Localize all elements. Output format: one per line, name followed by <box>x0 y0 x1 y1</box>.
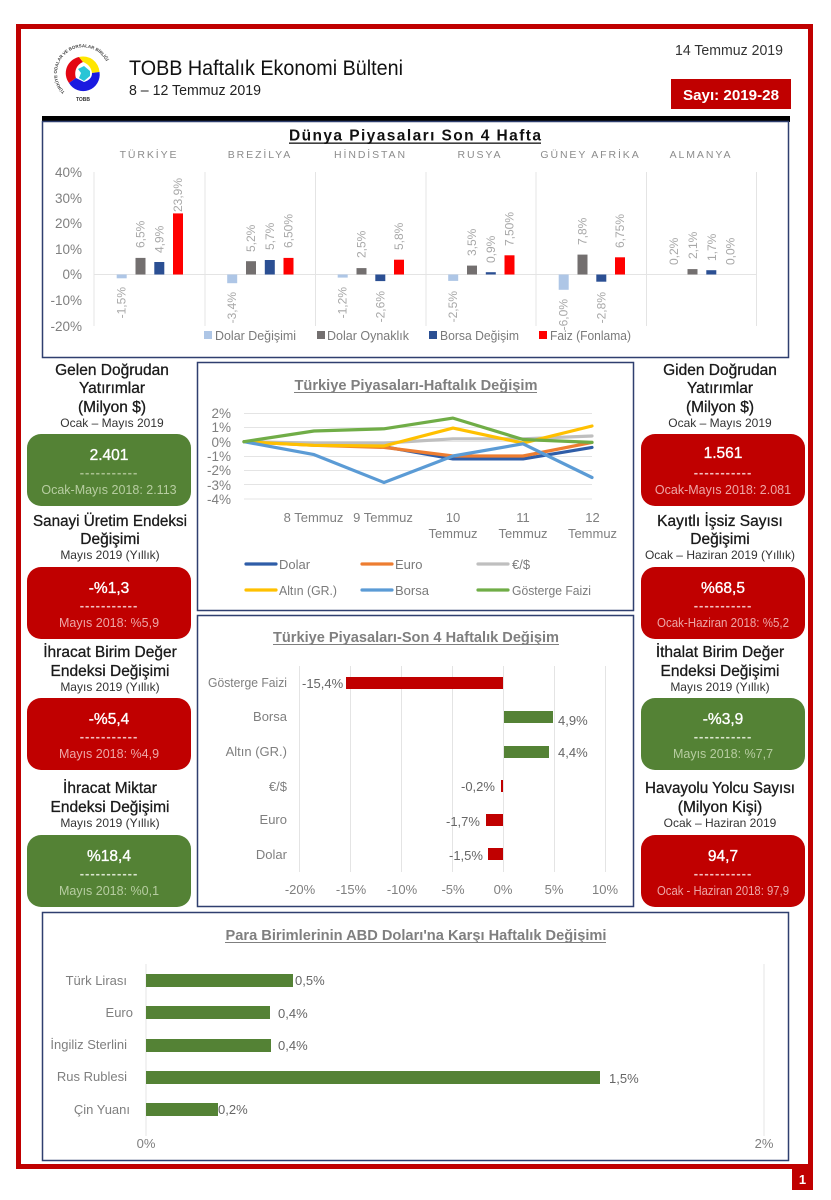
currency values: 0,5% <box>295 973 325 988</box>
line: Borsa <box>244 442 592 482</box>
rotated data labels: -2,8% <box>594 292 608 323</box>
currency categories: Çin Yuanı <box>74 1102 130 1117</box>
rotated data labels: -6,0% <box>557 299 571 330</box>
bar chart x axis: 5% <box>545 882 564 897</box>
kpi: sanayi üretim: Mayıs 2019 (Yıllık) <box>60 548 160 562</box>
kpi: havayolu yolcu: Havayolu Yolcu Sayısı <box>645 780 795 797</box>
kpi: kayıtlı işsiz: Kayıtlı İşsiz Sayısı <box>657 512 783 530</box>
line chart y axis: -1% <box>207 449 231 464</box>
rotated data labels: 1,7% <box>705 233 719 261</box>
issue badge <box>671 79 791 109</box>
bar values: -1,7% <box>446 814 480 829</box>
rotated data labels: 0,9% <box>484 235 498 263</box>
kpi: ihracat miktar <box>27 779 191 907</box>
line chart x axis: Temmuz <box>568 526 617 541</box>
kpi: gelen doğrudan yatırımlar: Ocak – Mayıs 2019 <box>60 416 164 430</box>
bar values: 4,9% <box>558 713 588 728</box>
kpi: havayolu yolcu <box>641 780 805 907</box>
y axis labels: 10% <box>55 242 82 257</box>
kpi: sanayi üretim <box>27 512 191 639</box>
rotated data labels: 5,8% <box>392 222 406 250</box>
bar values: -0,2% <box>461 779 495 794</box>
currency categories: İngiliz Sterlini <box>50 1037 127 1052</box>
rotated data labels: 7,50% <box>502 212 516 246</box>
kpi: gelen doğrudan yatırımlar: (Milyon $) <box>78 399 146 416</box>
line chart legend: Gösterge Faizi <box>512 583 591 598</box>
legend: Dolar Oynaklık <box>327 328 409 343</box>
bar chart x axis: -10% <box>387 882 418 897</box>
line chart legend: €/$ <box>512 557 531 572</box>
currency grid <box>146 964 764 1136</box>
line chart x axis: 11 <box>516 510 530 525</box>
rotated data labels: -1,2% <box>336 287 350 318</box>
line chart y axis: -3% <box>207 478 231 493</box>
line chart y axis: 0% <box>211 435 231 450</box>
issue badge: Sayı: 2019-28 <box>683 87 779 104</box>
kpi: kayıtlı işsiz: ----------- <box>694 598 752 613</box>
bar chart categories: Euro <box>260 812 287 827</box>
line chart title: Türkiye Piyasaları-Haftalık Değişim <box>294 378 538 394</box>
y axis labels: 40% <box>55 165 82 180</box>
kpi: ithalat birim değer: Endeksi Değişimi <box>661 663 779 680</box>
kpi: gelen doğrudan yatırımlar: 2.401 <box>90 447 128 464</box>
kpi: sanayi üretim: -%1,3 <box>89 580 129 597</box>
currency categories: Euro <box>106 1005 133 1020</box>
bar chart categories: Gösterge Faizi <box>208 675 287 690</box>
bars: Dolar Değişimi <box>117 274 569 290</box>
bar values: -15,4% <box>302 676 344 691</box>
rotated data labels: 0,0% <box>724 237 738 265</box>
kpi: sanayi üretim: Sanayi Üretim Endeksi <box>33 512 187 530</box>
rotated data labels: 0,2% <box>667 237 681 265</box>
bar values <box>302 676 588 863</box>
country labels: TÜRKİYE <box>120 148 178 161</box>
rotated data labels: 2,5% <box>354 230 368 258</box>
country labels: RUSYA <box>458 149 502 161</box>
currency categories <box>50 973 133 1117</box>
rotated data labels: -1,5% <box>115 287 129 318</box>
line chart legend: Borsa <box>395 583 430 598</box>
bar chart categories: Altın (GR.) <box>226 744 287 759</box>
bar chart categories: Dolar <box>256 847 288 862</box>
line: Altın <box>244 426 592 446</box>
bar chart x axis: -5% <box>441 882 465 897</box>
currency values: 0,4% <box>278 1006 308 1021</box>
line chart y axis <box>207 406 231 507</box>
country labels: HİNDİSTAN <box>334 148 407 161</box>
kpi: giden doğrudan yatırımlar: Ocak – Mayıs 2019 <box>668 416 772 430</box>
kpi: ihracat birim değer: Endeksi Değişimi <box>51 663 169 680</box>
line chart x axis: Temmuz <box>428 526 478 541</box>
currency values: 1,5% <box>609 1071 639 1086</box>
country labels: ALMANYA <box>670 149 732 161</box>
bar chart title: Türkiye Piyasaları-Son 4 Haftalık Değişim <box>273 630 559 646</box>
bar values: 4,4% <box>558 745 588 760</box>
kpi: ithalat birim değer: İthalat Birim Değer <box>656 643 784 661</box>
kpi: ihracat miktar: İhracat Miktar <box>63 779 157 797</box>
kpi: kayıtlı işsiz <box>641 512 805 639</box>
country labels: GÜNEY AFRİKA <box>540 148 641 161</box>
line chart x axis: 8 Temmuz <box>284 510 343 525</box>
rotated data labels: 5,7% <box>263 222 277 250</box>
kpi: ihracat miktar: Mayıs 2018: %0,1 <box>59 884 159 898</box>
line chart legend: Dolar <box>279 557 311 572</box>
world markets title: Dünya Piyasaları Son 4 Hafta <box>289 128 541 144</box>
kpi: ihracat birim değer: Mayıs 2019 (Yıllık) <box>60 680 160 694</box>
bar chart x axis: 10% <box>592 882 618 897</box>
line chart x axis <box>284 510 617 541</box>
y axis labels: -20% <box>50 319 82 334</box>
kpi: havayolu yolcu: 94,7 <box>708 848 738 865</box>
publication date: 14 Temmuz 2019 <box>675 43 783 59</box>
rotated data labels: -2,6% <box>373 291 387 322</box>
kpi: gelen doğrudan yatırımlar: ----------- <box>80 465 138 480</box>
kpi: ihracat birim değer: İhracat Birim Değer <box>43 643 177 661</box>
kpi: giden doğrudan yatırımlar: ----------- <box>694 465 752 480</box>
kpi: sanayi üretim: Mayıs 2018: %5,9 <box>59 616 159 630</box>
currency x axis: 2% <box>755 1136 774 1151</box>
rotated data labels: 3,5% <box>465 228 479 256</box>
panel: currencies against USD <box>42 912 788 1160</box>
line chart x axis: 12 <box>585 510 600 525</box>
kpi: giden doğrudan yatırımlar: Ocak-Mayıs 2018: 2.081 <box>655 483 791 497</box>
currency categories: Türk Lirası <box>66 973 127 988</box>
kpi: ihracat miktar: %18,4 <box>87 848 131 865</box>
bar chart x axis <box>285 882 618 897</box>
kpi: gelen doğrudan yatırımlar: Yatırımlar <box>79 380 145 397</box>
kpi: ithalat birim değer: ----------- <box>694 729 752 744</box>
kpi: ithalat birim değer: Mayıs 2018: %7,7 <box>673 747 773 761</box>
legend: Dolar Değişimi <box>215 328 296 343</box>
bars: Borsa Değişim <box>154 260 716 282</box>
line: Dolar <box>244 442 592 459</box>
line chart legend: Euro <box>395 557 422 572</box>
panel: four-week bar chart <box>198 616 634 906</box>
bar chart x axis: 0% <box>494 882 513 897</box>
currency x axis: 0% <box>137 1136 156 1151</box>
bars <box>346 677 553 860</box>
legend <box>204 328 631 343</box>
rotated data labels <box>115 178 737 330</box>
kpi: giden doğrudan yatırımlar: (Milyon $) <box>686 399 754 416</box>
panel: world markets <box>42 122 788 358</box>
country labels: BREZİLYA <box>228 148 292 161</box>
bar chart categories: Borsa <box>253 709 288 724</box>
grid <box>94 172 757 326</box>
rotated data labels: -2,5% <box>446 291 460 322</box>
line: Euro <box>244 442 592 456</box>
kpi: havayolu yolcu: Ocak – Haziran 2019 <box>664 816 777 830</box>
y axis labels <box>50 165 82 334</box>
line chart y axis: 2% <box>211 406 231 421</box>
line chart legend: Altın (GR.) <box>279 583 337 598</box>
kpi: ihracat birim değer <box>27 643 191 770</box>
kpi: havayolu yolcu: ----------- <box>694 866 752 881</box>
kpi: ithalat birim değer <box>641 643 805 770</box>
kpi: giden doğrudan yatırımlar: Giden Doğrudan <box>663 362 777 379</box>
header logo: TÜRKİYE ODALAR VE BORSALAR BİRLİĞİ <box>54 44 110 94</box>
line chart y axis: -4% <box>207 492 231 507</box>
line chart x axis: Temmuz <box>498 526 548 541</box>
line: Gösterge Faizi <box>244 418 592 442</box>
kpi: havayolu yolcu: (Milyon Kişi) <box>678 799 762 816</box>
kpi: giden doğrudan yatırımlar: 1.561 <box>704 445 742 462</box>
currency bars <box>146 974 600 1116</box>
kpi: kayıtlı işsiz: Değişimi <box>690 531 750 548</box>
kpi: ihracat birim değer: -%5,4 <box>89 711 130 728</box>
bar values: -1,5% <box>449 848 483 863</box>
kpi: ithalat birim değer: -%3,9 <box>703 711 743 728</box>
bar chart x axis: -15% <box>336 882 367 897</box>
line chart legend <box>246 557 591 598</box>
bar chart x axis: -20% <box>285 882 316 897</box>
header logo: TOBB <box>76 97 90 103</box>
kpi: gelen doğrudan yatırımlar <box>27 362 191 506</box>
kpi: kayıtlı işsiz: %68,5 <box>701 580 745 597</box>
rotated data labels: 7,8% <box>576 217 590 245</box>
kpi: sanayi üretim: ----------- <box>80 598 138 613</box>
line chart x axis: 10 <box>446 510 460 525</box>
legend: Borsa Değişim <box>440 328 519 343</box>
y axis labels: 20% <box>55 216 82 231</box>
header rule <box>42 116 790 122</box>
y axis labels: 0% <box>62 267 82 282</box>
line: €/$ <box>244 436 592 443</box>
bar chart categories: €/$ <box>269 779 288 794</box>
kpi: giden doğrudan yatırımlar: Yatırımlar <box>687 380 753 397</box>
kpi: ihracat miktar: ----------- <box>80 866 138 881</box>
y axis labels: 30% <box>55 191 82 206</box>
currency values: 0,4% <box>278 1038 308 1053</box>
kpi: gelen doğrudan yatırımlar: Ocak-Mayıs 2018: 2.113 <box>41 483 177 497</box>
page number <box>792 1168 813 1190</box>
panel: weekly line chart <box>198 362 634 610</box>
bars: Dolar Oynaklık <box>136 255 698 274</box>
currency x axis <box>137 1136 774 1151</box>
rotated data labels: 23,9% <box>171 178 185 212</box>
bar chart categories <box>208 675 288 862</box>
header date range: 8 – 12 Temmuz 2019 <box>129 83 261 99</box>
line chart x axis: 9 Temmuz <box>353 510 413 525</box>
rotated data labels: -3,4% <box>225 292 239 323</box>
rotated data labels: 6,50% <box>282 214 296 248</box>
currency values <box>218 973 639 1117</box>
kpi: giden doğrudan yatırımlar <box>641 362 805 506</box>
rotated data labels: 6,5% <box>134 220 148 248</box>
kpi: sanayi üretim: Değişimi <box>80 531 140 548</box>
kpi: ithalat birim değer: Mayıs 2019 (Yıllık) <box>670 680 770 694</box>
line chart grid <box>244 414 592 499</box>
legend: Faiz (Fonlama) <box>550 328 631 343</box>
y axis labels: -10% <box>50 293 82 308</box>
rotated data labels: 2,1% <box>686 231 700 259</box>
kpi: ihracat miktar: Endeksi Değişimi <box>51 799 169 816</box>
header title: TOBB Haftalık Ekonomi Bülteni <box>129 57 403 80</box>
bars: Faiz (Fonlama) <box>173 213 625 274</box>
currency chart title: Para Birimlerinin ABD Doları'na Karşı Haftalık Değişimi <box>226 928 606 944</box>
kpi: kayıtlı işsiz: Ocak-Haziran 2018: %5,2 <box>657 616 789 630</box>
kpi: ihracat birim değer: Mayıs 2018: %4,9 <box>59 747 159 761</box>
line chart y axis: 1% <box>211 420 231 435</box>
rotated data labels: 4,9% <box>152 225 166 253</box>
bar chart grid <box>300 666 606 872</box>
line chart y axis: -2% <box>207 463 231 478</box>
rotated data labels: 5,2% <box>244 224 258 252</box>
kpi: kayıtlı işsiz: Ocak – Haziran 2019 (Yıllık) <box>645 548 795 562</box>
rotated data labels: 6,75% <box>613 214 627 248</box>
country labels <box>120 148 732 161</box>
kpi: havayolu yolcu: Ocak - Haziran 2018: 97,9 <box>657 884 789 898</box>
currency categories: Rus Rublesi <box>57 1069 127 1084</box>
kpi: ihracat miktar: Mayıs 2019 (Yıllık) <box>60 816 160 830</box>
currency values: 0,2% <box>218 1102 248 1117</box>
kpi: gelen doğrudan yatırımlar: Gelen Doğrudan <box>55 362 169 379</box>
page number: 1 <box>799 1172 806 1187</box>
kpi: ihracat birim değer: ----------- <box>80 729 138 744</box>
